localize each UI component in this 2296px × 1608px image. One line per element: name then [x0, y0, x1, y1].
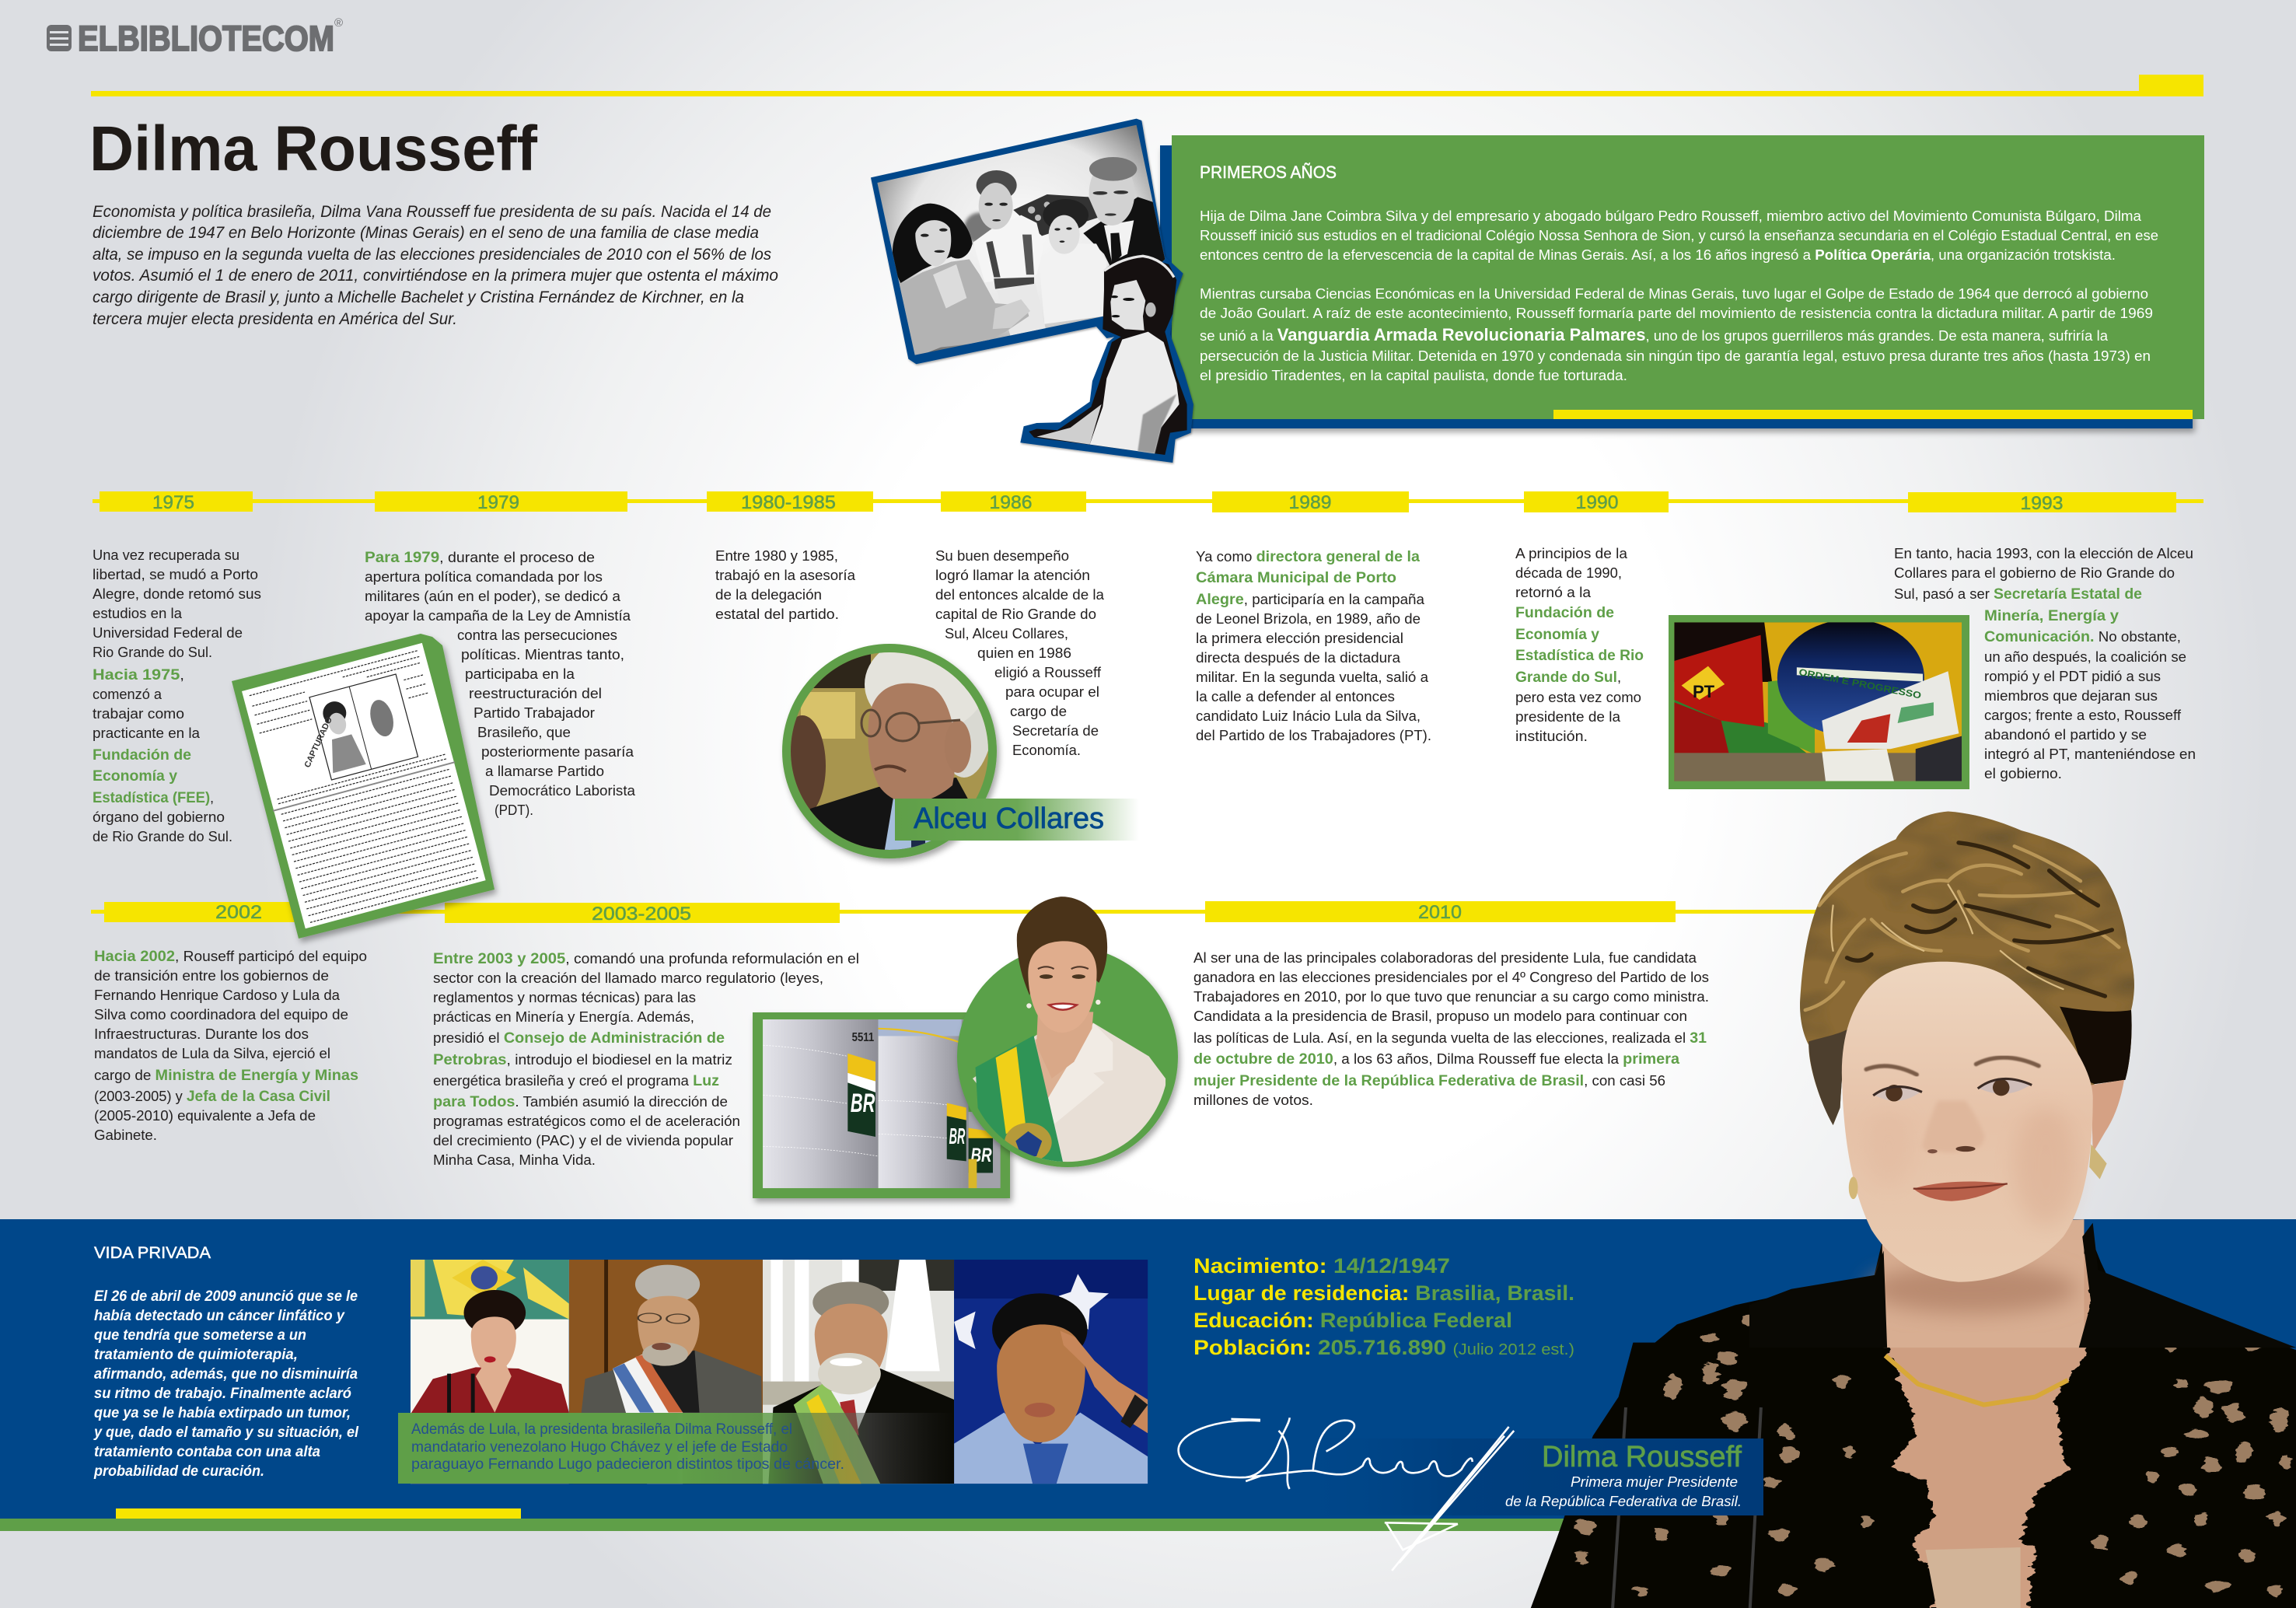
text: 1979: Democrático Laborista: [489, 782, 636, 799]
text: 1975: comenzó a: [93, 686, 163, 702]
hair: [1800, 811, 2134, 1125]
text: 2002: de transición entre los gobiernos de: [94, 967, 329, 984]
facts list: Lugar de residencia: Brasilia, Brasil.: [1193, 1281, 1574, 1305]
neck: [1882, 1219, 2084, 1348]
text: vida privada: que ya se le había extirpado un tumor,: [94, 1405, 351, 1421]
text: 1980-1985: de la delegación: [715, 586, 822, 603]
text: 2002: [94, 948, 367, 1143]
text: 1986: del entonces alcalde de la: [935, 586, 1105, 603]
text: 1993: Minería, Energía y: [1984, 607, 2119, 624]
toddler: [1040, 243, 1106, 324]
text: 1979: militares (aún en el poder), se dedicó a: [365, 588, 621, 604]
label: name box: Primera mujer Presidente: [1571, 1473, 1738, 1490]
2002: [104, 902, 299, 923]
text: vida privada: El 26 de abril de 2009 anunció que se le: [94, 1288, 358, 1305]
text: 2003-2005: [433, 950, 859, 1168]
BR sign middle: BR: [949, 1124, 966, 1149]
sash: [975, 1036, 1063, 1162]
text block: primeros años: el presidio Tiradentes, en la capital paulista, donde fue torturada.: [1200, 367, 1627, 383]
text: 1979: a llamarse Partido: [485, 763, 604, 779]
1975: 1975: [152, 492, 194, 513]
title: Dilma Rousseff: [89, 114, 538, 184]
intro text: alta, se impuso en la segunda vuelta de las elecciones presidenciales de 2010 con el 56% de los: [93, 246, 771, 264]
text block: primeros años: de João Goulart. A raíz de este acontecimiento, Rousseff formaría parte del movimiento de resistencia contra la dictadura militar. A partir de 1969: [1200, 305, 2153, 321]
text: 1990: institución.: [1515, 728, 1588, 744]
text: 2002: Gabinete.: [94, 1127, 157, 1143]
text: 1979: Partido Trabajador: [474, 704, 595, 721]
lips: [1913, 1181, 2008, 1201]
1980-1985: 1980-1985: [741, 492, 836, 513]
id photo: [286, 674, 418, 786]
text: 1990: década de 1990,: [1515, 565, 1622, 581]
text: 1975: órgano del gobierno: [93, 809, 225, 825]
text: 1989: candidato Luiz Inácio Lula da Silva,: [1196, 708, 1421, 724]
text: 1990: presidente de la: [1515, 708, 1621, 725]
text: 1993: abandonó el partido y se: [1984, 726, 2147, 743]
label: name box: [1291, 1438, 1763, 1515]
text: 1975: [93, 547, 261, 844]
text: 2010: de octubre de 2010, a los 63 años, Dilma Rousseff fue electa la primera: [1193, 1050, 1679, 1068]
text: 1993: En tanto, hacia 1993, con la elección de Alceu: [1894, 545, 2193, 561]
text: 2002: (2005-2010) equivalente a Jefa de: [94, 1107, 316, 1124]
1980-1985: [707, 491, 873, 513]
text: 1989: la primera elección presidencial: [1196, 630, 1403, 646]
photo: Petrobras tanks: 5511: [852, 1031, 874, 1044]
signature: [1179, 1417, 1514, 1571]
neck: [1036, 1012, 1093, 1078]
text: 1979: apertura política comandada por los: [365, 568, 603, 585]
text: 1993: integró al PT, manteniéndose en: [1984, 746, 2196, 762]
2003-2005: [445, 903, 840, 925]
photo: Hugo Chávez: [954, 1260, 1148, 1484]
text: 1989: directa después de la dictadura: [1196, 649, 1401, 666]
text: vida privada: su ritmo de trabajo. Finalmente aclaró: [94, 1386, 351, 1402]
text: 1980-1985: [715, 547, 856, 622]
photo: Fernando Lugo: [569, 1260, 763, 1484]
photos: four presidents: [411, 1260, 1148, 1484]
text: 2003-2005: para Todos. También asumió la dirección de: [433, 1093, 728, 1110]
text block: primeros años: [1200, 208, 2158, 383]
text: 2003-2005: Petrobras, introdujo el biodiesel en la matriz: [433, 1051, 732, 1068]
text: 1993: Comunicación. No obstante,: [1984, 628, 2181, 645]
boy: [1008, 319, 1046, 336]
1979: [375, 491, 627, 513]
text: 1979: (PDT).: [494, 802, 533, 818]
text: 1990: Estadística de Rio: [1515, 647, 1644, 664]
text: 2010: Candidata a la presidencia de Brasil, propuso un modelo para continuar con: [1193, 1008, 1687, 1024]
photo: Dilma with presidential sash: [957, 897, 1178, 1184]
text: vida privada: afirmando, además, que no disminuiría: [94, 1366, 358, 1383]
label: name box: de la República Federativa de Brasil.: [1505, 1493, 1742, 1509]
face: [1842, 962, 2093, 1282]
text: vida privada: [93, 1288, 359, 1480]
young Dilma cutout: [1029, 255, 1187, 455]
text: 1990: A principios de la: [1515, 545, 1628, 561]
mother: [900, 259, 1029, 358]
text: 2003-2005: presidió el Consejo de Administración de: [433, 1029, 725, 1047]
text: 2002: cargo de Ministra de Energía y Minas: [94, 1067, 358, 1084]
header rule: [91, 75, 2203, 96]
1989: [1212, 491, 1409, 513]
text: 1975: Fundación de: [93, 746, 191, 764]
2003-2005: 2003-2005: [592, 904, 691, 925]
BR sign middle: [947, 1103, 966, 1161]
caption overlay: paraguayo Fernando Lugo padecieron distintos tipos de cáncer.: [411, 1456, 844, 1473]
id photo: CAPTURADO: [302, 715, 334, 769]
BR sign large: [847, 1054, 875, 1137]
logo: ELBIBLIOTECOM: ®: [334, 16, 343, 30]
text: 1986: Sul, Alceu Collares,: [945, 625, 1068, 641]
photo: Lula: [763, 1260, 954, 1484]
text: 2002: Hacia 2002, Rouseff participó del equipo: [94, 948, 367, 965]
text: 1979: posteriormente pasaría: [481, 743, 634, 760]
text: 1979: políticas. Mientras tanto,: [461, 646, 624, 662]
text: 1986: logró llamar la atención: [935, 567, 1090, 583]
BR sign large: BR: [851, 1089, 875, 1118]
earrings: [2089, 1145, 2107, 1180]
1993: 1993: [2020, 493, 2064, 514]
photo: PT rally with flags: ORDEM E PROGRESSO: [1798, 666, 1922, 701]
text: vida privada: probabilidad de curación.: [93, 1463, 264, 1480]
caption overlay: mandatario venezolano Hugo Chávez y el jefe de Estado: [411, 1439, 788, 1456]
label: Alceu Collares: Alceu Collares: [914, 802, 1104, 835]
text: 1989: Cámara Municipal de Porto: [1196, 569, 1396, 586]
text: 1975: Una vez recuperada su: [93, 547, 239, 563]
text: 1989: la calle a defender al entonces: [1196, 688, 1395, 704]
text: vida privada: tratamiento de quimioterapia,: [94, 1347, 298, 1363]
text: vida privada: tratamiento contaba con una alta: [94, 1444, 320, 1460]
1993: [1908, 492, 2176, 514]
text: 2010: millones de votos.: [1193, 1092, 1313, 1108]
intro text: tercera mujer electa presidenta en América del Sur.: [93, 310, 457, 328]
label: Alceu Collares: [895, 799, 1139, 841]
text: 1975: Estadística (FEE),: [93, 789, 214, 806]
intro text: votos. Asumió el 1 de enero de 2011, convirtiéndose en la primera mujer que ostenta el máximo: [93, 267, 778, 285]
text: 1986: Economía.: [1012, 742, 1081, 758]
hair: [1017, 897, 1107, 995]
text: 1993: [1894, 545, 2196, 781]
father: [1083, 197, 1169, 270]
text: 1990: pero esta vez como: [1515, 689, 1641, 705]
2010: [1205, 901, 1676, 923]
1979: 1979: [477, 492, 519, 513]
intro text: diciembre de 1947 en Belo Horizonte (Minas Gerais) en el seno de una familia de clase media: [93, 224, 759, 242]
text block: primeros años: se unió a la Vanguardia Armada Revolucionaria Palmares, uno de los grupos guerrilleros más grandes. De esta manera, sufriría la: [1200, 325, 2109, 344]
text: 1993: Sul, pasó a ser Secretaría Estatal de: [1894, 586, 2142, 603]
text: 1975: Economía y: [93, 767, 177, 785]
lace jacket: [1531, 1244, 2296, 1608]
text: 1979: apoyar la campaña de la Ley de Amnistía: [365, 607, 631, 624]
text: 2010: las políticas de Lula. Así, en la segunda vuelta de las elecciones, realizada el 31: [1193, 1029, 1707, 1047]
text: 1979: [365, 549, 636, 818]
text: vida privada: había detectado un cáncer linfático y: [94, 1308, 345, 1324]
text: 2003-2005: Minha Casa, Minha Vida.: [433, 1152, 596, 1168]
facts list: Población: 205.716.890 (Julio 2012 est.): [1193, 1336, 1574, 1359]
text: 1975: estudios en la: [93, 605, 183, 621]
2002: 2002: [215, 902, 262, 923]
1990: [1524, 491, 1669, 513]
facts list: Nacimiento: 14/12/1947: [1193, 1254, 1450, 1278]
text: 1979: reestructuración del: [469, 685, 602, 701]
facts list: Educación: República Federal: [1193, 1309, 1512, 1332]
text: 1979: participaba en la: [465, 666, 575, 682]
caption overlay: Además de Lula, la presidenta brasileña Dilma Rousseff, el: [411, 1421, 792, 1438]
logo: ELBIBLIOTECOM: ELBIBLIOTECOM: [78, 19, 334, 58]
sofa: [1013, 194, 1098, 236]
timeline 2: [91, 901, 1825, 925]
text: 2002: (2003-2005) y Jefa de la Casa Civil: [94, 1088, 330, 1105]
text: 2010: Trabajadores en 2010, por lo que tuvo que renunciar a su cargo como ministra.: [1193, 988, 1709, 1005]
black collar: [1749, 1250, 1887, 1348]
text: 2010: [1193, 949, 1709, 1108]
text: 1975: trabajar como: [93, 705, 184, 722]
text: 1993: miembros que dejaran sus: [1984, 687, 2158, 704]
photo: PT rally with flags: PT: [1693, 682, 1715, 701]
text: 1986: quien en 1986: [977, 645, 1071, 661]
text: 1993: el gobierno.: [1984, 765, 2062, 781]
text block: primeros años: Mientras cursaba Ciencias Económicas en la Universidad Federal de Minas Gerais, tuvo lugar el Golpe de Estado de 1964 que derrocó al gobierno: [1200, 285, 2148, 302]
text: 2003-2005: reglamentos y normas técnicas) para las: [433, 989, 696, 1005]
text: 2003-2005: del crecimiento (PAC) y el de vivienda popular: [433, 1132, 733, 1148]
text: 2002: Infraestructuras. Durante los dos: [94, 1026, 309, 1042]
text: 1993: un año después, la coalición se: [1984, 648, 2186, 665]
panel: primeros años: [1160, 135, 2204, 428]
text block: primeros años: Rousseff inició sus estudios en el tradicional Colégio Nossa Senhora de Sion, y cursó la enseñanza secundaria en el Colégio Estadual Central, en ese: [1200, 227, 2158, 243]
photo: Rousseff family portrait and young Dilma cutout: [871, 119, 1193, 463]
text: 1989: del Partido de los Trabajadores (PT).: [1196, 727, 1431, 743]
photo: Petrobras tanks: [753, 1012, 1010, 1198]
text block: primeros años: Hija de Dilma Jane Coimbra Silva y del empresario y abogado búlgaro Pedro Rousseff, miembro activo del Movimiento Comunista Búlgaro, Dilma: [1200, 208, 2142, 224]
text: 2003-2005: energética brasileña y creó el programa Luz: [433, 1072, 719, 1089]
text: 2003-2005: sector con la creación del llamado marco regulatorio (leyes,: [433, 970, 823, 986]
text: 2003-2005: Entre 2003 y 2005 , comandó una profunda reformulación en el: [433, 950, 859, 967]
text: 1979: contra las persecuciones: [457, 627, 617, 643]
text: 1986: cargo de: [1010, 703, 1067, 719]
text: 1989: militar. En la segunda vuelta, salió a: [1196, 669, 1429, 685]
text block: primeros años: persecución de la Justicia Militar. Detenida en 1970 y condenada sin ningún tipo de garantía legal, estuvo presa durante tres años (hasta 1973) en: [1200, 348, 2151, 364]
text: 2003-2005: prácticas en Minería y Energía. Además,: [433, 1008, 694, 1025]
text: 1980-1985: Entre 1980 y 1985,: [715, 547, 838, 564]
text: 1986: capital de Rio Grande do: [935, 606, 1096, 622]
face: [1028, 941, 1097, 1033]
text: 1975: practicante en la: [93, 725, 201, 741]
text: 2010: mujer Presidente de la República Federativa de Brasil , con casi 56: [1193, 1072, 1665, 1089]
text: 2010: ganadora en las elecciones presidenciales por el 4º Congreso del Partido de los: [1193, 969, 1709, 985]
text: 1993: rompió y el PDT pidió a sus: [1984, 668, 2161, 684]
text: 1993: Collares para el gobierno de Rio Grande do: [1894, 565, 2175, 581]
2010: 2010: [1418, 902, 1462, 923]
photo: Alceu Collares: [778, 630, 1139, 863]
eyes: [1873, 1078, 2032, 1102]
1990: 1990: [1575, 492, 1619, 513]
text: 1993: cargos; frente a esto, Rousseff: [1984, 707, 2182, 723]
text: 1986: Su buen desempeño: [935, 547, 1069, 564]
label: name box: Dilma Rousseff: [1542, 1441, 1742, 1473]
text: 1975: Alegre, donde retomó sus: [93, 586, 261, 602]
text: 1989: de Leonel Brizola, en 1989, año de: [1196, 610, 1421, 627]
text: 1975: Rio Grande do Sul.: [93, 644, 212, 660]
text: 2003-2005: programas estratégicos como el de aceleración: [433, 1113, 740, 1129]
intro text: cargo dirigente de Brasil y, junto a Michelle Bachelet y Cristina Fernández de Kirchner, en la: [93, 288, 744, 306]
text: 1980-1985: estatal del partido.: [715, 606, 839, 622]
facts list: [1193, 1254, 1574, 1359]
text: 1975: Universidad Federal de: [93, 624, 243, 641]
text: 2002: Silva como coordinadora del equipo de: [94, 1006, 348, 1022]
text: vida privada: y que, dado el tamaño y su situación, el: [93, 1424, 359, 1441]
text: 1989: Ya como directora general de la: [1196, 548, 1420, 565]
text block: primeros años: entonces centro de la efervescencia de la capital de Minas Gerais. Así, a los 16 años ingresó a Política Operária, una organización trotskista.: [1200, 246, 2116, 263]
text: 1990: Grande do Sul,: [1515, 669, 1621, 686]
text: vida privada: que tendría que someterse a un: [94, 1327, 306, 1344]
caption overlay: [398, 1413, 954, 1484]
text: 1980-1985: trabajó en la asesoría: [715, 567, 856, 583]
portrait: Dilma Rousseff large: [1531, 811, 2296, 1608]
text: 1986: Secretaría de: [1012, 722, 1099, 739]
1989: 1989: [1289, 492, 1331, 513]
jacket: [973, 1023, 1166, 1162]
skin V: [1885, 1254, 2094, 1608]
text: 2002: Fernando Henrique Cardoso y Lula da: [94, 987, 341, 1003]
text: 1990: retornó a la: [1515, 584, 1592, 600]
intro text: [93, 203, 778, 328]
text: 1986: [935, 547, 1105, 758]
text: 1975: Hacia 1975 ,: [93, 666, 184, 683]
text: 1975: libertad, se mudó a Porto: [93, 566, 258, 582]
text: 2010: Al ser una de las principales colaboradoras del presidente Lula, fue candidata: [1193, 949, 1697, 966]
eyebrows: [1866, 1057, 2039, 1075]
heading: primeros años: PRIMEROS AÑOS: [1200, 163, 1337, 182]
text: 1979: Brasileño, que: [477, 724, 571, 740]
text: 1990: [1515, 545, 1644, 744]
text: 1979: Para 1979 , durante el proceso de: [365, 549, 595, 566]
photo: Dilma at podium: [411, 1260, 569, 1484]
document card: police record: [232, 634, 494, 939]
text: 1990: Fundación de: [1515, 604, 1614, 621]
text: 1989: Alegre, participaría en la campaña: [1196, 591, 1425, 608]
band: vida privada: [0, 1219, 2296, 1531]
photo: PT rally with flags: [1669, 615, 1969, 789]
1986: [941, 491, 1086, 513]
1986: 1986: [989, 492, 1033, 513]
BR sign small: BR: [970, 1145, 992, 1166]
text: 2002: mandatos de Lula da Silva, ejerció el: [94, 1045, 330, 1061]
text: 1990: Economía y: [1515, 626, 1599, 643]
text: 1975: de Rio Grande do Sul.: [93, 828, 232, 844]
ear: [2091, 1080, 2124, 1153]
text: 1989: [1196, 548, 1431, 743]
heading: vida privada: VIDA PRIVADA: [94, 1244, 211, 1262]
intro text: Economista y política brasileña, Dilma Vana Rousseff fue presidenta de su país. Nacida el 14 de: [93, 203, 771, 221]
text: 1986: para ocupar el: [1005, 683, 1099, 700]
nose: [1922, 1101, 1985, 1153]
timeline 1: [93, 491, 2203, 514]
BR sign small: [969, 1128, 993, 1173]
text: 1986: eligió a Rousseff: [994, 664, 1102, 680]
1975: [100, 491, 253, 513]
